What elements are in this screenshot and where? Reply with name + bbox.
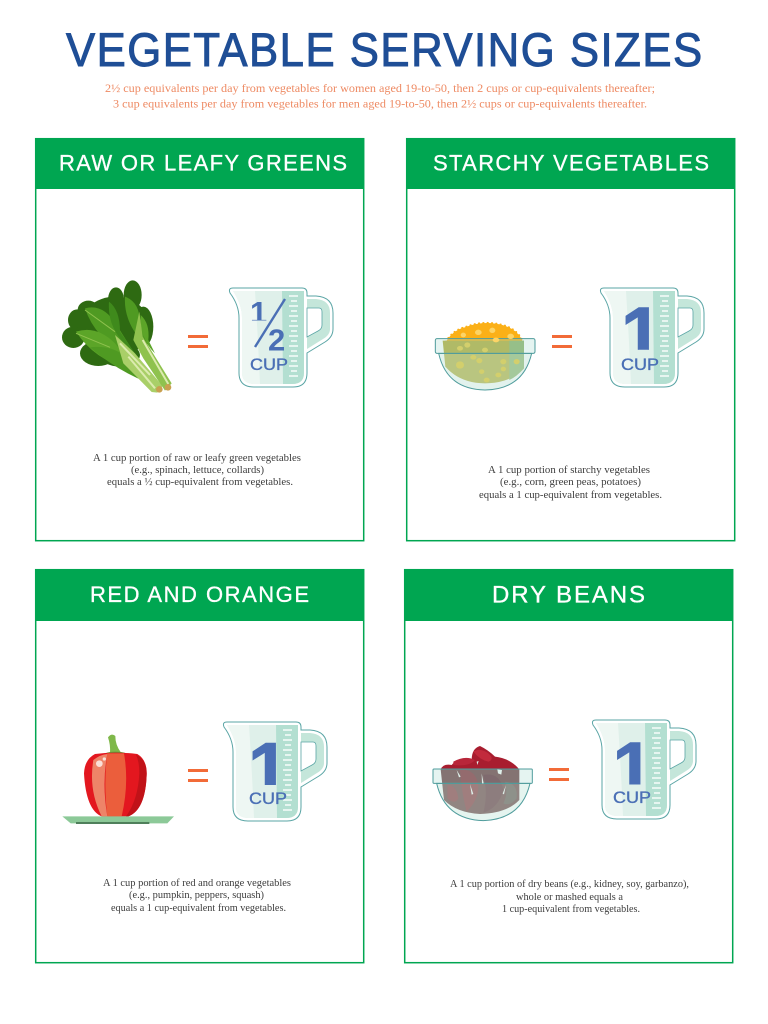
intro text: 2½ cup equivalents per day from vegetables for women aged 19-to-50, then 2 cups or cup-equivalents thereafter; xyxy=(105,83,655,95)
icon: red pepper on plate xyxy=(62,735,174,824)
description: red and orange: (e.g., pumpkin, peppers, squash) xyxy=(129,890,264,901)
equals sign xyxy=(552,335,572,348)
description: raw or leafy greens: equals a ½ cup-equivalent from vegetables. xyxy=(107,477,293,488)
icon: one cup measure: CUP xyxy=(613,788,651,807)
description: raw or leafy greens: (e.g., spinach, lettuce, collards) xyxy=(131,465,264,476)
panel header: red and orange: RED AND ORANGE xyxy=(90,582,309,607)
description: dry beans xyxy=(450,879,689,915)
icon: one cup measure xyxy=(600,288,704,387)
title: VEGETABLE SERVING SIZES xyxy=(66,24,702,76)
intro text xyxy=(105,83,655,110)
icon: spinach bunch xyxy=(62,280,172,393)
icon: one cup measure xyxy=(592,720,696,819)
icon: one cup measure xyxy=(223,722,327,821)
description: red and orange xyxy=(103,878,291,914)
panel header: starchy vegetables xyxy=(406,138,735,189)
icon: bowl of corn xyxy=(435,323,535,390)
icon: one cup measure: CUP xyxy=(621,355,659,374)
intro text: 3 cup equivalents per day from vegetables for men aged 19-to-50, then 2½ cups or cup-equivalents thereafter. xyxy=(113,98,647,110)
description: dry beans: whole or mashed equals a xyxy=(516,892,623,903)
description: starchy vegetables: A 1 cup portion of starchy vegetables xyxy=(488,465,650,476)
panel header: raw or leafy greens xyxy=(35,138,364,189)
description: red and orange: A 1 cup portion of red and orange vegetables xyxy=(103,878,291,889)
panel: red and orange xyxy=(35,569,364,963)
icon: half cup measure: 1 xyxy=(250,295,267,330)
panel: starchy vegetables xyxy=(406,138,735,541)
description: starchy vegetables: (e.g., corn, green peas, potatoes) xyxy=(500,477,641,488)
description: raw or leafy greens: A 1 cup portion of raw or leafy green vegetables xyxy=(93,453,301,464)
icon: half cup measure: 2 xyxy=(268,322,285,358)
equals sign xyxy=(188,335,208,348)
icon: half cup measure: CUP xyxy=(250,355,288,374)
equals sign xyxy=(188,769,208,782)
panel: dry beans xyxy=(404,569,733,963)
description: red and orange: equals a 1 cup-equivalent from vegetables. xyxy=(111,903,286,914)
description: dry beans: 1 cup-equivalent from vegetables. xyxy=(502,904,640,915)
description: starchy vegetables: equals a 1 cup-equivalent from vegetables. xyxy=(479,490,662,501)
description: starchy vegetables xyxy=(479,465,662,501)
icon: one cup measure: 1 xyxy=(621,292,662,375)
description: dry beans: A 1 cup portion of dry beans (e.g., kidney, soy, garbanzo), xyxy=(450,879,689,890)
icon: one cup measure: 1 xyxy=(612,727,654,810)
equals sign xyxy=(549,768,569,781)
icon: bowl of kidney beans xyxy=(433,746,532,821)
icon: one cup measure: 1 xyxy=(248,728,289,810)
icon: one cup measure: CUP xyxy=(249,789,287,808)
description: raw or leafy greens xyxy=(93,453,301,488)
panel header: starchy vegetables: STARCHY VEGETABLES xyxy=(433,150,709,176)
panel header: dry beans xyxy=(404,569,733,621)
panel header: raw or leafy greens: RAW OR LEAFY GREENS xyxy=(59,150,347,176)
panel header: dry beans: DRY BEANS xyxy=(492,582,645,608)
panel header: red and orange xyxy=(35,569,364,621)
panel: raw or leafy greens xyxy=(35,138,364,541)
icon: half cup measure xyxy=(229,288,333,387)
